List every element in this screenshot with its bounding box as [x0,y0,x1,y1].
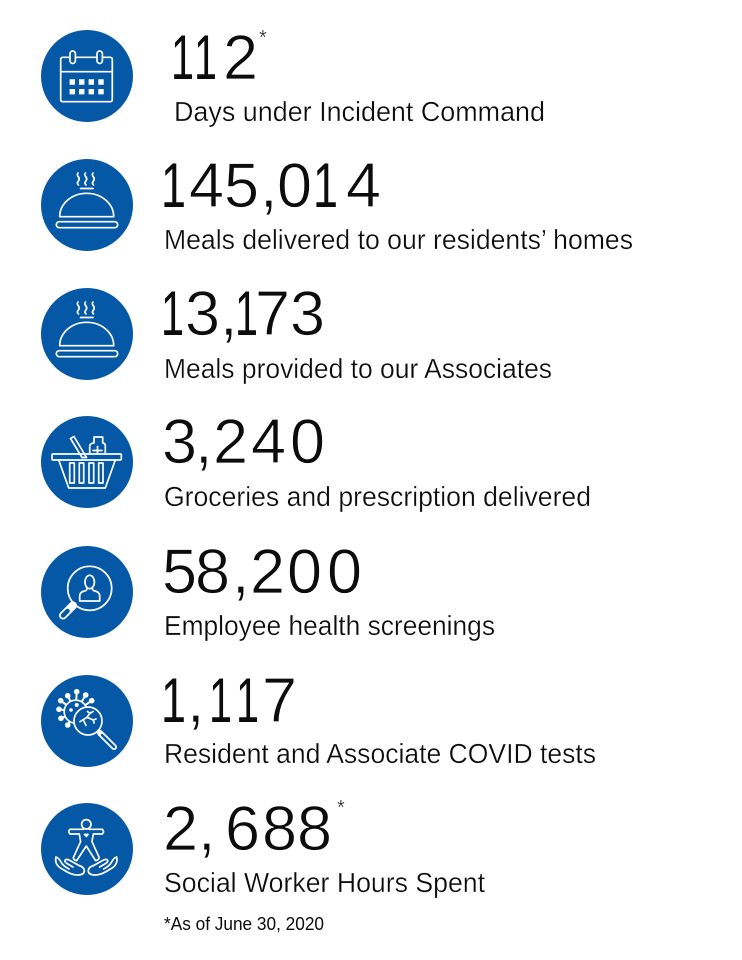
metric: associate meals: 3 [290,279,325,349]
metric: health screenings: 5 [162,537,197,607]
metric: health screenings [162,537,495,641]
metric: social worker hours: 6 [225,794,260,864]
footnote: *As of June 30, 2020 [164,914,324,934]
icon: meal cloche [41,159,133,251]
metric: social worker hours [163,794,485,898]
icon: associate meal cloche [41,288,133,380]
metric: meals delivered: , [260,151,278,221]
metric: meals delivered: 4 [346,151,381,221]
metric: health screenings: 8 [195,537,230,607]
metric: meals delivered: 4 [189,151,224,221]
metric: meals delivered: 0 [277,151,312,221]
metric: groceries and prescriptions: 3 [162,407,197,477]
metric: meals delivered: 5 [224,151,259,221]
metric: meals delivered [161,151,633,255]
metric: health screenings: 2 [250,537,285,607]
metric: days under incident command: Days under Incident Command [174,96,545,127]
metric: meals delivered: 1 [161,151,186,221]
metric: health screenings: 0 [287,537,322,607]
metric: health screenings: , [232,537,250,607]
icon: calendar [41,30,133,122]
metric: associate meals: Meals provided to our Associates [164,353,552,384]
metric: health screenings: 0 [327,537,362,607]
metric: associate meals: 1 [235,279,258,349]
metric: covid tests: 1 [236,666,259,736]
metric: groceries and prescriptions: 0 [290,407,325,477]
icon: grocery basket [41,416,133,508]
metric: meals delivered: 1 [313,151,338,221]
metric: days under incident command: 2 [223,23,258,93]
metric: associate meals: , [220,279,238,349]
icon: virus under magnifier [41,675,133,767]
metric: covid tests: 7 [262,666,297,736]
metric: days under incident command: 1 [171,23,194,93]
metric: social worker hours: 8 [297,794,332,864]
metric: groceries and prescriptions: Groceries and prescription delivered [164,481,591,512]
metric: covid tests: 1 [209,666,232,736]
metric: covid tests: 1 [161,666,186,736]
metric: social worker hours: * [337,797,345,819]
metric: groceries and prescriptions [162,407,591,512]
metric: social worker hours: , [198,794,216,864]
metric: covid tests: , [187,666,205,736]
metric: associate meals [161,279,552,384]
icon: health screening magnifier [41,546,133,638]
metric: social worker hours: 2 [163,794,198,864]
metric: days under incident command: * [259,27,267,49]
icon: caring hands and person [41,803,133,895]
metric: associate meals: 7 [255,279,290,349]
metric: groceries and prescriptions: 4 [251,407,286,477]
metric: groceries and prescriptions: 2 [213,407,248,477]
metric: days under incident command [171,23,545,127]
metric: covid tests [161,666,596,769]
metric: meals delivered: Meals delivered to our residents’ homes [164,224,633,255]
metric: covid tests: Resident and Associate COVID tests [164,738,596,769]
metric: days under incident command: 1 [194,23,217,93]
metric: groceries and prescriptions: , [195,407,213,477]
metric: associate meals: 3 [185,279,220,349]
metric: associate meals: 1 [161,279,184,349]
metric: social worker hours: 8 [262,794,297,864]
metric: health screenings: Employee health screenings [164,610,495,641]
metric: social worker hours: Social Worker Hours Spent [164,867,485,898]
